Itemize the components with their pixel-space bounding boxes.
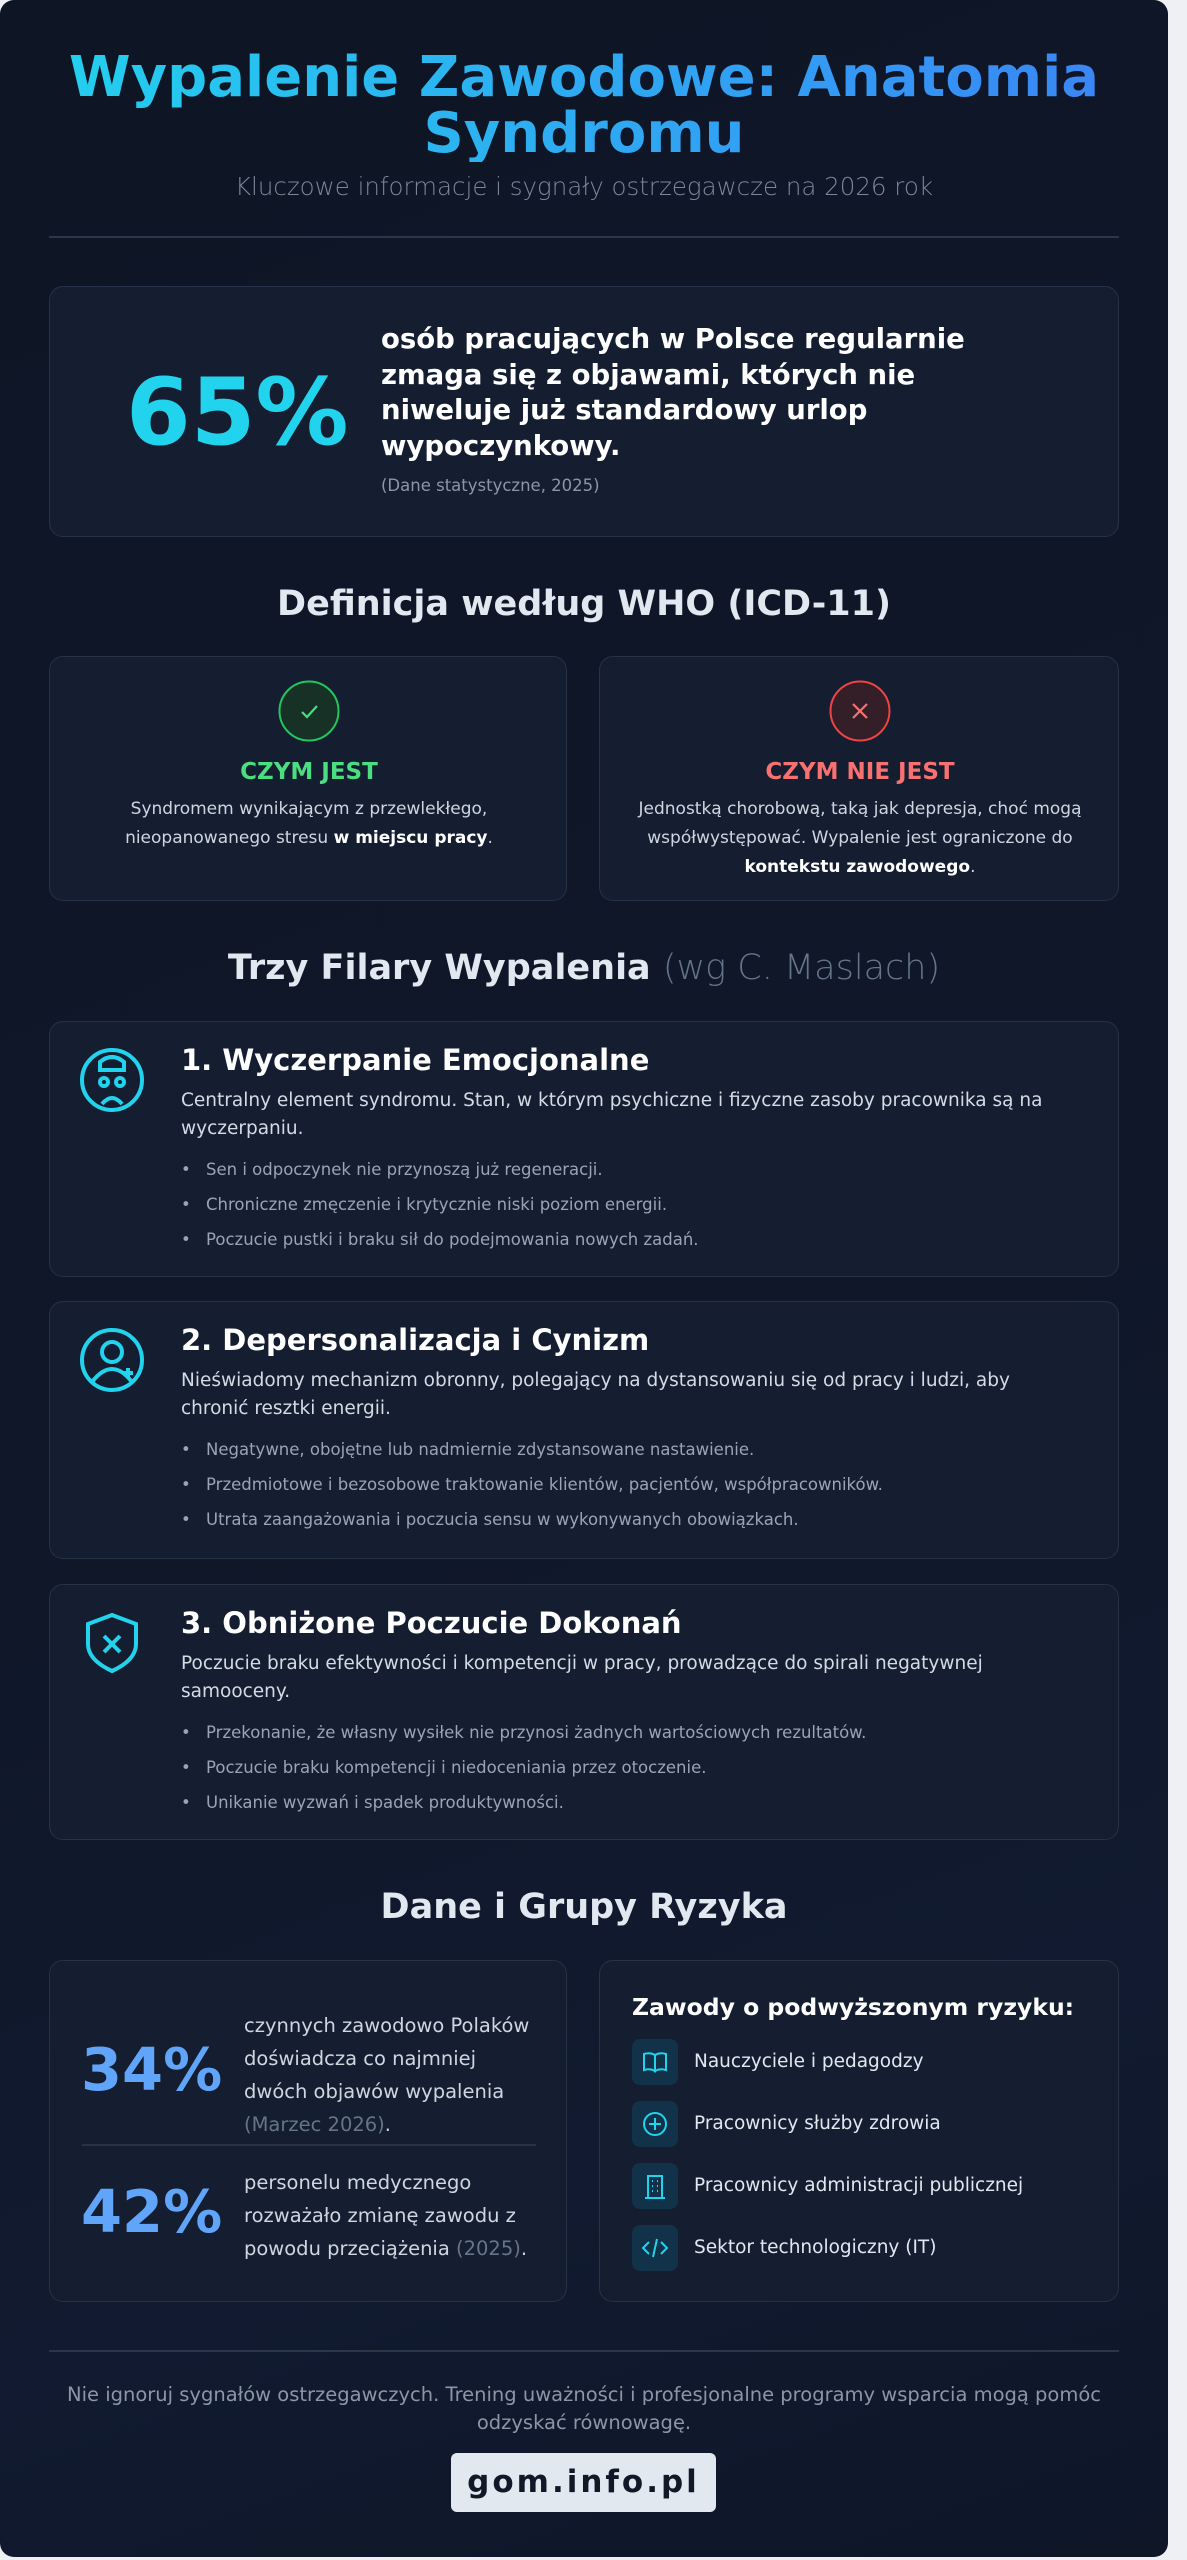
bullets [184,1723,866,1812]
title: Wypalenie Zawodowe: Anatomia [69,45,1099,110]
bullets [184,1160,699,1249]
stat 42% text: personelu medycznego rozważało zmianę zawodu z powodu przeciążenia (2025). [244,2171,527,2260]
item: teachers: Nauczyciele i pedagodzy [694,2051,924,2072]
bullets: Utrata zaangażowania i poczucia sensu w wykonywanych obowiązkach. [206,1510,799,1529]
panel: statistics [49,1960,567,2302]
bullets: Poczucie pustki i braku sił do podejmowania nowych zadań. [206,1230,699,1249]
stat 34% text: czynnych zawodowo Polaków doświadcza co najmniej dwóch objawów wypalenia (Marzec 2026). [244,2014,529,2136]
description: Nieświadomy mechanizm obronny, polegający na dystansowaniu się od pracy i ludzi, aby chronić resztki energii. [181,1370,1010,1419]
panel: pillar 3 [49,1584,1119,1840]
stat text: osób pracujących w Polsce regularnie zmaga się z objawami, których nie niweluje już standardowy urlop wypoczynkowy. [381,323,965,462]
icon: shield x [86,1612,138,1674]
icon: book [632,2039,678,2085]
stat 34%: 34% [81,2035,222,2104]
panel: key stat 65% [49,286,1119,537]
icon: user [80,1328,144,1392]
bullets: Unikanie wyzwań i spadek produktywności. [206,1793,564,1812]
heading: data & risk groups: Dane i Grupy Ryzyka [381,1887,787,1927]
bullets: Poczucie braku kompetencji i niedoceniania przez otoczenie. [206,1758,706,1777]
bullets: Sen i odpoczynek nie przynoszą już regeneracji. [206,1160,603,1179]
title: 2. Depersonalizacja i Cynizm [181,1323,649,1357]
item: health [632,2101,941,2147]
subtitle: Kluczowe informacje i sygnały ostrzegawcze na 2026 rok [235,172,933,201]
panel: czym jest [49,656,567,901]
heading: WHO definition: Definicja według WHO (ICD-11) [277,584,891,624]
bullets [184,1440,883,1529]
icon: building [632,2163,678,2209]
bullets: Chroniczne zmęczenie i krytycznie niski poziom energii. [206,1195,667,1214]
title [0,50,1168,162]
icon: check [278,680,340,742]
source note: (Dane statystyczne, 2025) [381,476,600,495]
panel: pillar 2 [49,1301,1119,1559]
footer text: Nie ignoruj sygnałów ostrzegawczych. Trening uważności i profesjonalne programy wsparcia mogą pomóc odzyskać równowagę. [67,2383,1101,2434]
item: administration [632,2163,1023,2209]
item: administration: Pracownicy administracji publicznej [694,2175,1023,2196]
label: CZYM NIE JEST [765,759,955,785]
label: CZYM JEST [240,759,378,785]
item: IT: Sektor technologiczny (IT) [694,2237,936,2258]
icon: x [830,680,890,742]
icon: plus [632,2101,678,2147]
heading: Zawody o podwyższonym ryzyku: [632,1993,1074,2021]
text: Syndromem wynikającym z przewlekłego, nieopanowanego stresu w miejscu pracy. [125,799,493,848]
panel: risk professions [599,1960,1119,2302]
heading: three pillars: Trzy Filary Wypalenia (wg C. Maslach) [228,948,940,988]
icon: code [632,2225,678,2271]
icon: exhausted face [80,1048,144,1112]
title: 1. Wyczerpanie Emocjonalne [181,1043,649,1077]
text: Jednostką chorobową, taką jak depresja, choć mogą współwystępować. Wypalenie jest ograniczone do kontekstu zawodowego. [638,799,1082,877]
panel: czym nie jest [599,656,1119,901]
stat 42%: 42% [81,2177,222,2246]
title: Syndromu [423,101,745,166]
panel: pillar 1 [49,1021,1119,1277]
title: 3. Obniżone Poczucie Dokonań [181,1606,682,1640]
bullets: Przekonanie, że własny wysiłek nie przynosi żadnych wartościowych rezultatów. [206,1723,866,1742]
item: health: Pracownicy służby zdrowia [694,2113,941,2134]
bullets: Negatywne, obojętne lub nadmiernie zdystansowane nastawienie. [206,1440,754,1459]
description: Poczucie braku efektywności i kompetencji w pracy, prowadzące do spirali negatywnej samooceny. [181,1653,983,1702]
big number 65%: 65% [126,358,349,466]
brand button: gom.info.pl [467,2464,700,2500]
bullets: Przedmiotowe i bezosobowe traktowanie klientów, pacjentów, współpracowników. [206,1475,883,1494]
brand button [451,2453,716,2512]
item: IT [632,2225,936,2271]
description: Centralny element syndromu. Stan, w którym psychiczne i fizyczne zasoby pracownika są na wyczerpaniu. [181,1090,1042,1139]
item: teachers [632,2039,924,2085]
